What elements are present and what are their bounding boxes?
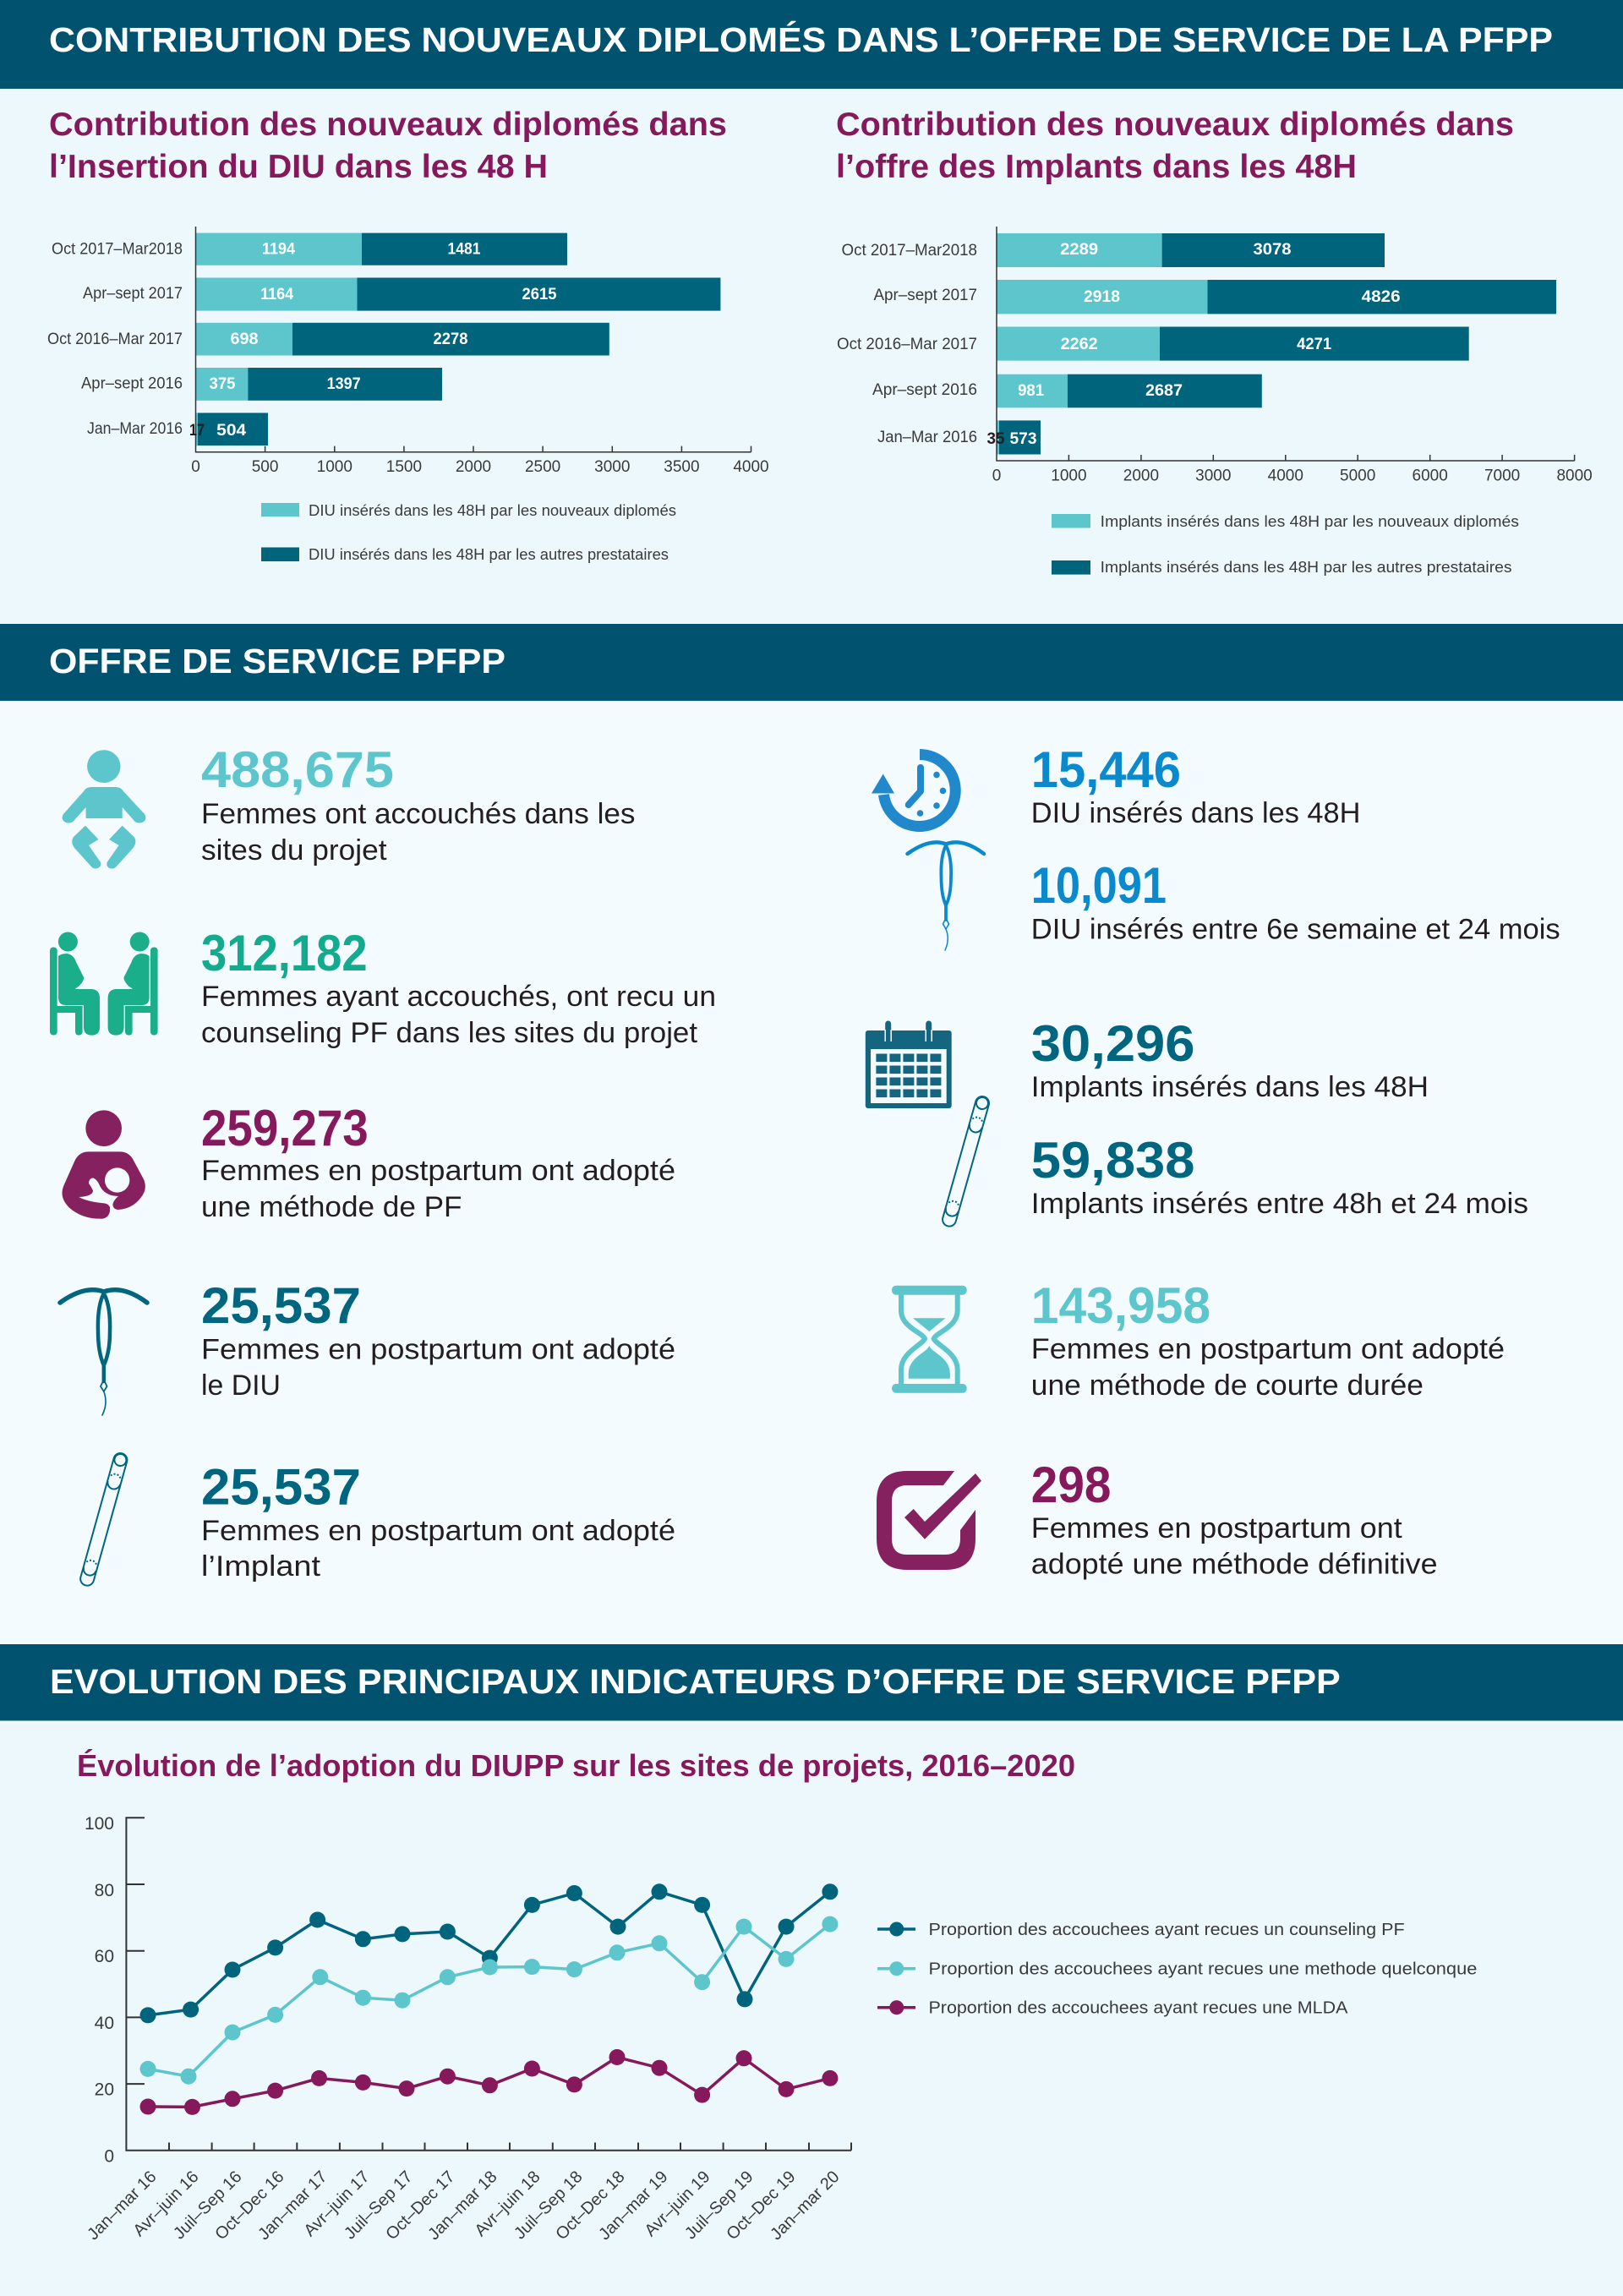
x axis labels: Juil–Sep 18 bbox=[511, 2168, 587, 2243]
icon: IUD bbox=[60, 1290, 147, 1415]
line chart: évolution: 20 bbox=[95, 2080, 114, 2100]
chart title: évolution DIUPP: Évolution de l’adoption du DIUPP sur les sites de projets, 2016–2020 bbox=[77, 1748, 1075, 1783]
x axis labels: Jan–mar 16 bbox=[84, 2168, 161, 2244]
bar chart: implants: Apr–sept 2017 bbox=[874, 287, 977, 304]
icon: clock with arrow bbox=[872, 754, 955, 826]
x axis labels: Juil–Sep 17 bbox=[341, 2168, 417, 2243]
number: 59,838: 59,838 bbox=[1031, 1132, 1195, 1189]
section header: offre de service: OFFRE DE SERVICE PFPP bbox=[49, 642, 505, 681]
bar chart: implants: 4271 bbox=[1297, 336, 1332, 353]
icon: implant rod bbox=[941, 1095, 991, 1227]
bar chart: DIU: Apr–sept 2016 bbox=[81, 375, 183, 393]
text: courte durée: Femmes en postpartum ont adopté bbox=[1031, 1333, 1505, 1365]
bar chart: DIU: 1397 bbox=[327, 375, 361, 393]
icon: baby bbox=[63, 750, 145, 869]
number: 488,675: 488,675 bbox=[201, 741, 394, 798]
heading: implants chart bbox=[836, 107, 1514, 185]
legend: line chart: Proportion des accouchees ayant recues un counseling PF bbox=[928, 1921, 1405, 1939]
bar chart: DIU: 1000 bbox=[317, 458, 352, 476]
bar chart: implants: 2289 bbox=[1060, 241, 1098, 259]
number: 25,537: 25,537 bbox=[201, 1277, 361, 1334]
text: adopté l'implant bbox=[201, 1515, 675, 1583]
bar chart: DIU: 1500 bbox=[386, 458, 422, 476]
bar chart: DIU: Jan–Mar 2016 bbox=[87, 420, 183, 438]
text: méthode de PF: Femmes en postpartum ont adopté bbox=[201, 1155, 675, 1187]
bar chart: implants: 3000 bbox=[1195, 467, 1231, 485]
icon: hourglass bbox=[892, 1286, 967, 1393]
legend: implants chart: Implants insérés dans les 48H par les autres prestataires bbox=[1101, 559, 1511, 576]
section header: contribution: CONTRIBUTION DES NOUVEAUX DIPLOMÉS DANS L’OFFRE DE SERVICE DE LA PFPP bbox=[49, 20, 1553, 59]
panel: DIU chart bbox=[47, 107, 769, 563]
x axis labels: Jan–mar 19 bbox=[595, 2168, 672, 2244]
bar chart: DIU: 3500 bbox=[664, 458, 700, 476]
bar chart: implants: 6000 bbox=[1413, 467, 1448, 485]
bar chart: implants bbox=[837, 227, 1593, 485]
bar chart: DIU: 1164 bbox=[260, 286, 293, 303]
heading: implants chart: Contribution des nouveaux diplomés dans bbox=[836, 107, 1514, 143]
text: adopté l'implant: Femmes en postpartum ont adopté bbox=[201, 1515, 675, 1547]
bar chart: implants: Oct 2016–Mar 2017 bbox=[837, 336, 977, 353]
x axis labels: Juil–Sep 19 bbox=[681, 2168, 757, 2243]
stat group: implants insérés bbox=[866, 1015, 1528, 1227]
bar chart: implants: 8000 bbox=[1556, 467, 1593, 485]
stat: courte durée bbox=[892, 1277, 1505, 1402]
legend: DIU chart bbox=[261, 502, 676, 563]
number: 298: 298 bbox=[1031, 1457, 1111, 1513]
heading: DIU chart bbox=[49, 107, 727, 185]
bar chart: implants: 4000 bbox=[1268, 467, 1303, 485]
x axis labels: Avr–juin 17 bbox=[300, 2168, 374, 2240]
x axis labels: Oct–Dec 17 bbox=[382, 2168, 459, 2244]
bar chart: DIU: 375 bbox=[210, 375, 236, 393]
heading: implants chart: l’offre des Implants dans les 48H bbox=[836, 149, 1357, 185]
line chart: évolution: 80 bbox=[95, 1881, 114, 1900]
text: implants 24 mois: Implants insérés entre 48h et 24 mois bbox=[1031, 1188, 1528, 1220]
bar chart: implants: 35 bbox=[987, 430, 1005, 448]
text: adopté le DIU: Femmes en postpartum ont adopté bbox=[201, 1334, 675, 1366]
bar chart: implants: 2918 bbox=[1084, 288, 1120, 306]
text: adopté le DIU: le DIU bbox=[201, 1369, 281, 1402]
bar chart: DIU: Apr–sept 2017 bbox=[83, 285, 183, 303]
x axis labels: Oct–Dec 16 bbox=[211, 2168, 288, 2244]
bar chart: implants: Apr–sept 2016 bbox=[872, 381, 977, 399]
bar chart: DIU: 2000 bbox=[456, 458, 491, 476]
bar chart: DIU: 500 bbox=[252, 458, 278, 476]
bar chart: DIU: 17 bbox=[189, 422, 205, 440]
x axis labels: Avr–juin 16 bbox=[129, 2168, 203, 2240]
icon: check box bbox=[877, 1471, 981, 1570]
x axis labels: Oct–Dec 18 bbox=[552, 2168, 629, 2244]
text: courte durée bbox=[1031, 1333, 1505, 1402]
text: implants 48H: Implants insérés dans les 48H bbox=[1031, 1071, 1429, 1103]
section header: evolution: EVOLUTION DES PRINCIPAUX INDICATEURS D’OFFRE DE SERVICE PFPP bbox=[50, 1662, 1341, 1701]
x axis labels: Jan–mar 20 bbox=[767, 2168, 844, 2244]
number: 143,958: 143,958 bbox=[1031, 1277, 1210, 1334]
bar chart: DIU: 4000 bbox=[733, 458, 769, 476]
bar chart: implants: 573 bbox=[1009, 430, 1036, 448]
stat: accouchements bbox=[63, 741, 635, 869]
stat: méthode de PF bbox=[62, 1100, 675, 1223]
heading: DIU chart: Contribution des nouveaux diplomés dans bbox=[49, 107, 727, 143]
text: méthode de PF bbox=[201, 1155, 675, 1223]
text: counseling PF: Femmes ayant accouchés, ont recu un bbox=[201, 981, 716, 1013]
panel: implants chart bbox=[836, 107, 1593, 576]
x axis labels: Avr–juin 19 bbox=[641, 2168, 714, 2240]
x axis labels: Avr–juin 18 bbox=[471, 2168, 544, 2240]
legend: line chart bbox=[877, 1921, 1477, 2018]
bar chart: implants: Jan–Mar 2016 bbox=[877, 429, 977, 446]
legend: implants chart bbox=[1052, 513, 1519, 576]
legend: DIU chart: DIU insérés dans les 48H par les nouveaux diplomés bbox=[309, 502, 676, 519]
bar chart: DIU: 698 bbox=[230, 331, 259, 348]
text: méthode définitive: Femmes en postpartum ont bbox=[1031, 1512, 1402, 1544]
bar chart: implants: 3078 bbox=[1253, 241, 1292, 259]
series: méthode quelconque bbox=[140, 1916, 838, 2085]
bar chart: implants: 2262 bbox=[1061, 336, 1098, 353]
text: femmes accouchées: sites du projet bbox=[201, 834, 387, 866]
x axis labels bbox=[84, 2168, 844, 2244]
x axis labels: Oct–Dec 19 bbox=[723, 2168, 800, 2244]
bar chart: implants: 4826 bbox=[1362, 288, 1401, 306]
text: adopté l'implant: l’Implant bbox=[201, 1550, 321, 1583]
legend: line chart: Proportion des accouchees ayant recues une methode quelconque bbox=[928, 1960, 1477, 1979]
stat: DIU adopté bbox=[60, 1277, 675, 1415]
number: 259,273: 259,273 bbox=[201, 1100, 369, 1156]
line chart: évolution: 100 bbox=[85, 1814, 114, 1834]
bar chart: implants: 0 bbox=[992, 467, 1001, 485]
x axis labels: Jan–mar 18 bbox=[424, 2168, 501, 2244]
bar chart: implants: 981 bbox=[1018, 382, 1045, 400]
x axis labels: Juil–Sep 16 bbox=[170, 2168, 246, 2243]
text: DIU 6e semaine: DIU insérés entre 6e semaine et 24 mois bbox=[1031, 914, 1560, 946]
bar chart: implants: 5000 bbox=[1340, 467, 1375, 485]
text: méthode définitive bbox=[1031, 1512, 1438, 1581]
bar chart: DIU: 3000 bbox=[594, 458, 630, 476]
text: méthode de PF: une méthode de PF bbox=[201, 1191, 462, 1223]
line chart: évolution bbox=[84, 1814, 851, 2244]
bar chart: implants: Oct 2017–Mar2018 bbox=[842, 242, 977, 260]
icon: two seated women bbox=[50, 932, 158, 1036]
text: courte durée: une méthode de courte durée bbox=[1031, 1369, 1424, 1402]
bar chart: DIU: Oct 2017–Mar2018 bbox=[52, 241, 183, 259]
number: 25,537: 25,537 bbox=[201, 1458, 361, 1515]
icon: calendar bbox=[866, 1024, 952, 1108]
section header: contribution bbox=[0, 0, 1623, 89]
bar chart: DIU: 2278 bbox=[433, 331, 468, 348]
number: 30,296: 30,296 bbox=[1031, 1015, 1195, 1072]
line chart: évolution: 0 bbox=[104, 2147, 114, 2167]
bar chart: DIU bbox=[47, 227, 769, 476]
series: MLDA bbox=[140, 2049, 838, 2115]
text: méthode définitive: adopté une méthode définitive bbox=[1031, 1549, 1438, 1581]
section header: offre de service bbox=[0, 624, 1623, 701]
stat: implant adopté bbox=[79, 1451, 675, 1587]
icon: IUD blue bbox=[908, 842, 984, 950]
bar chart: DIU: 1481 bbox=[448, 241, 481, 259]
icon: implant rod bbox=[79, 1451, 128, 1587]
bar chart: DIU: 2500 bbox=[525, 458, 560, 476]
legend: DIU chart: DIU insérés dans les 48H par les autres prestataires bbox=[309, 546, 669, 563]
bar chart: DIU: 504 bbox=[216, 422, 247, 440]
bar chart: implants: 2687 bbox=[1145, 382, 1183, 400]
bar chart: DIU: Oct 2016–Mar 2017 bbox=[47, 331, 183, 348]
number: 10,091: 10,091 bbox=[1031, 857, 1167, 914]
bar chart: implants: 2000 bbox=[1123, 467, 1159, 485]
text: counseling PF: counseling PF dans les sites du projet bbox=[201, 1017, 698, 1049]
line chart: évolution: 60 bbox=[95, 1947, 114, 1966]
text: DIU 48H: DIU insérés dans les 48H bbox=[1031, 797, 1361, 829]
stat: méthode définitive bbox=[877, 1457, 1438, 1581]
text: adopté le DIU bbox=[201, 1334, 675, 1402]
x axis labels: Jan–mar 17 bbox=[254, 2168, 331, 2244]
icon: breastfeeding mother bbox=[62, 1110, 145, 1219]
text: femmes accouchées: Femmes ont accouchés dans les bbox=[201, 798, 636, 830]
bar chart: DIU: 1194 bbox=[262, 241, 295, 259]
stat group: DIU insérés bbox=[872, 741, 1560, 950]
bar chart: implants: 7000 bbox=[1484, 467, 1520, 485]
bar chart: DIU: 2615 bbox=[522, 286, 557, 303]
line chart: évolution: 40 bbox=[95, 2014, 114, 2033]
number: 15,446: 15,446 bbox=[1031, 741, 1181, 798]
legend: implants chart: Implants insérés dans les 48H par les nouveaux diplomés bbox=[1101, 513, 1519, 530]
text: counseling PF bbox=[201, 981, 716, 1049]
legend: line chart: Proportion des accouchees ayant recues une MLDA bbox=[928, 1999, 1348, 2018]
bar chart: implants: 1000 bbox=[1051, 467, 1087, 485]
series: counseling PF bbox=[140, 1883, 838, 2023]
text: femmes accouchées bbox=[201, 798, 636, 866]
section header: evolution bbox=[0, 1644, 1623, 1721]
number: 312,182: 312,182 bbox=[201, 925, 368, 981]
heading: DIU chart: l’Insertion du DIU dans les 48 H bbox=[49, 149, 548, 185]
bar chart: DIU: 0 bbox=[191, 458, 200, 476]
stat: counseling bbox=[50, 925, 716, 1049]
